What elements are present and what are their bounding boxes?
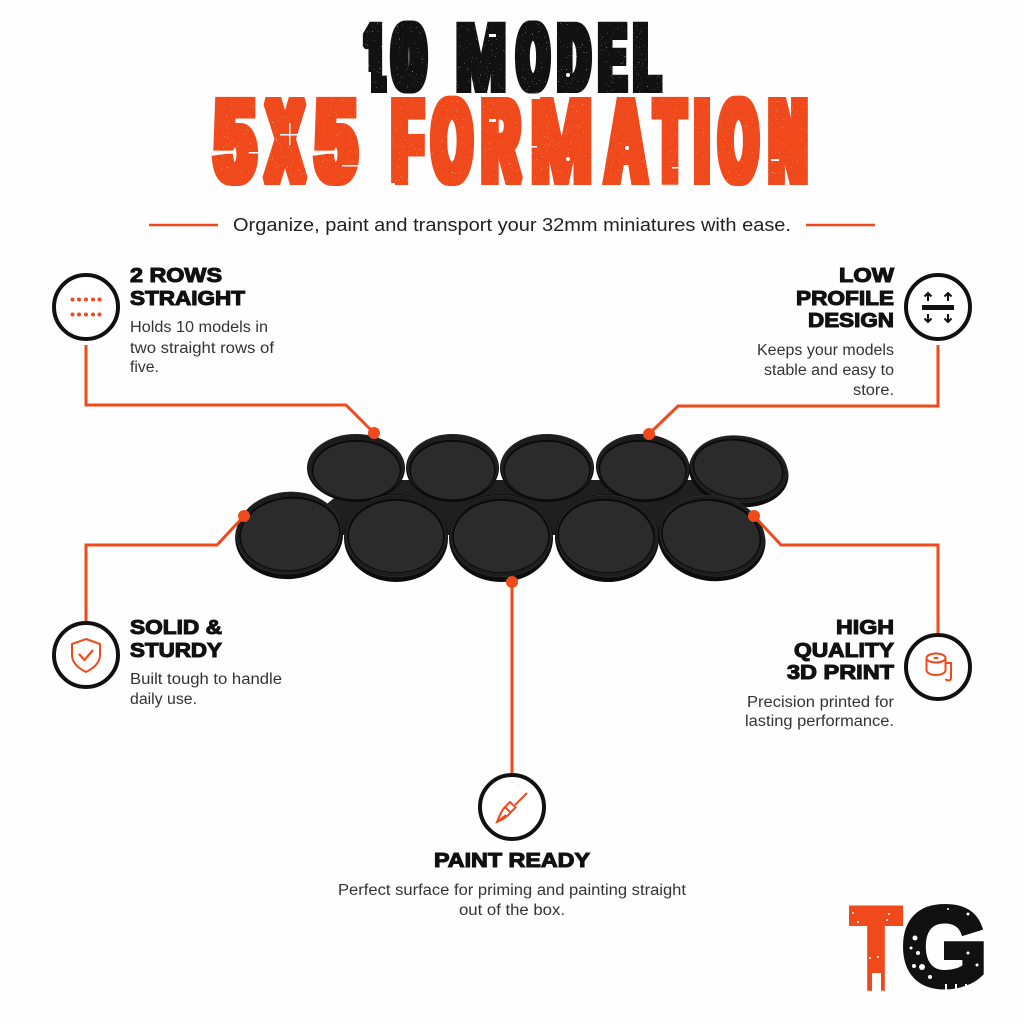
connector: high quality 3d print — [748, 510, 938, 634]
title line: 5X5 FORMATION — [216, 78, 806, 204]
title line: 10 MODEL: E — [600, 7, 625, 109]
heading: LOW — [839, 264, 895, 287]
logo: TG: T — [851, 886, 901, 1011]
description — [757, 342, 894, 399]
connector: 2 rows straight — [86, 345, 380, 439]
icon: paint brush — [480, 775, 544, 839]
heading: 3D PRINT — [787, 661, 895, 684]
heading: PAINT READY — [434, 849, 590, 872]
description: store. — [853, 382, 894, 399]
logo: TG — [851, 886, 987, 1011]
connector: paint ready — [506, 576, 518, 773]
description — [338, 882, 687, 919]
description: lasting performance. — [745, 713, 894, 730]
title line: 10 MODEL: 1 — [365, 7, 384, 109]
title line: 5X5 FORMATION: A — [607, 78, 645, 204]
description: out of the box. — [459, 902, 565, 919]
description: five. — [130, 359, 159, 376]
description: Holds 10 models in — [130, 319, 268, 336]
title line: 10 MODEL: M — [456, 7, 506, 109]
description — [745, 694, 894, 730]
description — [130, 671, 282, 708]
title line: 10 MODEL: 0 — [393, 6, 425, 108]
heading: 2 ROWS — [130, 264, 222, 287]
panel: low profile design — [757, 264, 970, 399]
heading: STURDY — [130, 639, 222, 662]
description: two straight rows of — [130, 340, 275, 357]
connector: low profile design — [643, 345, 938, 440]
title line: 5X5 FORMATION: I — [696, 78, 708, 204]
title line: 10 MODEL: O — [518, 6, 548, 108]
description: Perfect surface for priming and painting straight — [338, 882, 687, 899]
icon: low profile arrows — [906, 275, 970, 339]
title line: 5X5 FORMATION: O — [433, 78, 471, 204]
tray base — [289, 480, 739, 535]
heading — [796, 264, 895, 332]
text: N — [770, 78, 806, 204]
title line: 5X5 FORMATION: R — [483, 78, 519, 204]
heading: PROFILE — [796, 287, 894, 310]
heading: STRAIGHT — [130, 287, 246, 310]
description: daily use. — [130, 691, 197, 708]
description: stable and easy to — [764, 362, 894, 379]
heading — [130, 616, 222, 662]
panel: paint ready — [338, 775, 687, 919]
title — [216, 6, 806, 204]
title line: 5X5 FORMATION: O — [720, 78, 757, 204]
product photo: 10 model movement tray — [231, 429, 793, 588]
heading: HIGH — [836, 616, 894, 639]
connector: solid and sturdy — [86, 510, 250, 622]
title: L — [635, 7, 659, 109]
bottom row bases — [231, 487, 771, 588]
description: Keeps your models — [757, 342, 894, 359]
heading: SOLID & — [130, 616, 222, 639]
title line: 10 MODEL: D — [559, 7, 589, 109]
panel: 2 rows straight — [54, 264, 275, 376]
title line: 5X5 FORMATION: 5 — [317, 78, 355, 204]
subtitle: Organize, paint and transport your 32mm miniatures with ease. — [233, 214, 791, 235]
description: Built tough to handle — [130, 671, 282, 688]
panel: high quality 3d print — [745, 616, 970, 730]
logo: TG: G — [902, 886, 987, 1009]
heading: DESIGN — [808, 309, 894, 332]
icon: two rows of dots — [54, 275, 118, 339]
panel: solid and sturdy — [54, 616, 282, 708]
description: Precision printed for — [747, 694, 894, 711]
icon: shield with check — [54, 623, 118, 687]
top row bases — [307, 429, 793, 514]
icon: filament spool — [906, 635, 970, 699]
heading — [787, 616, 895, 684]
title line: 10 MODEL — [358, 6, 659, 109]
title line: 5X5 FORMATION: X — [267, 78, 303, 204]
title line: 5X5 FORMATION: M — [531, 78, 592, 204]
heading: QUALITY — [794, 639, 894, 662]
title line: 5X5 FORMATION: F — [393, 78, 422, 204]
title line: 5X5 FORMATION: 5 — [216, 78, 254, 204]
title line: 5X5 FORMATION: T — [656, 78, 684, 204]
heading — [130, 264, 246, 310]
description — [130, 319, 275, 376]
